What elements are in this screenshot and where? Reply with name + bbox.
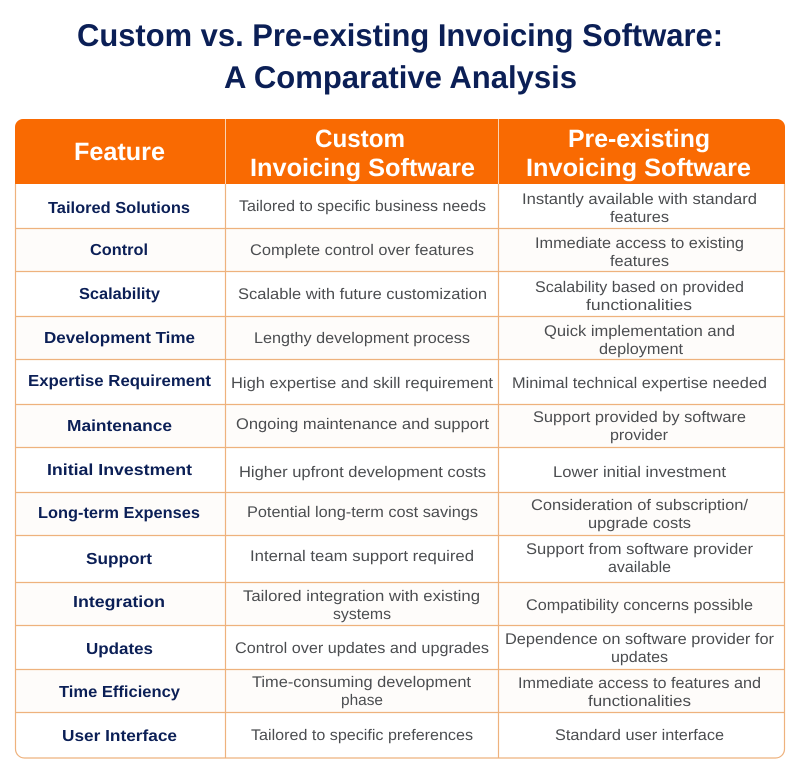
row: Long-term Expenses: Potential long-term cost savings [247,504,478,521]
row: Tailored Solutions [48,191,757,226]
row: Support [86,541,753,576]
row: Development Time: deployment [599,341,684,358]
row: Support: Support [86,551,153,568]
row: User Interface: Standard user interface [555,727,724,744]
row: Integration: systems [333,606,391,623]
table body background [16,184,784,758]
row: Control: features [610,253,669,270]
row: Development Time [44,323,735,358]
title [77,17,723,95]
row: Integration: Integration [73,594,165,611]
row: Maintenance [67,409,746,444]
row: User Interface: User Interface [62,728,177,745]
row: Updates: Updates [86,641,153,658]
header row [15,119,785,184]
row: Long-term Expenses [38,497,749,532]
row: Scalability: functionalities [586,297,692,314]
row: Maintenance: Support provided by software [533,409,746,426]
row: Tailored Solutions: Tailored Solutions [48,200,190,217]
header row: Feature [74,138,165,166]
row: Maintenance: provider [610,427,668,444]
comparison table [15,119,785,758]
row: Integration [73,588,753,623]
row: Control: Control [90,242,148,259]
row: Development Time: Lengthy development process [254,330,470,347]
row: Long-term Expenses: Consideration of subscription/ [531,497,749,514]
row: Initial Investment: Lower initial investment [553,464,727,481]
row: Scalability [79,279,744,314]
row: Scalability: Scalability [79,286,160,303]
row: Time Efficiency: Immediate access to features and [518,675,761,692]
row: Scalability: Scalable with future customization [238,286,487,303]
header row: Invoicing Software [526,154,751,182]
row: Time Efficiency: Time Efficiency [59,684,180,701]
row: Development Time: Development Time [44,330,195,347]
row: User Interface: Tailored to specific preferences [251,727,473,744]
row: Tailored Solutions: features [610,209,669,226]
header row: Pre-existing [568,125,710,153]
row: Updates [86,631,774,666]
row: Support: Support from software provider [526,541,753,558]
row: Expertise Requirement [28,373,767,392]
row: Control [90,235,744,270]
row: Time Efficiency [59,674,761,710]
row: Expertise Requirement: Minimal technical expertise needed [512,375,767,392]
row: Maintenance: Ongoing maintenance and support [236,416,490,433]
row: Updates: Control over updates and upgrades [235,640,489,657]
row: Development Time: Quick implementation and [544,323,735,340]
row: Time Efficiency: phase [341,692,383,709]
row: Scalability: Scalability based on provided [535,279,744,296]
row: Control: Complete control over features [250,242,474,259]
row: Integration: Compatibility concerns possible [526,597,753,614]
row: Time Efficiency: Time-consuming development [252,674,472,691]
row: Expertise Requirement: High expertise and skill requirement [231,375,494,392]
row: Integration: Tailored integration with existing [243,588,480,605]
row: Initial Investment: Initial Investment [47,462,193,479]
row: Expertise Requirement: Expertise Requirement [28,373,212,390]
title: Custom vs. Pre-existing Invoicing Software: [77,17,723,53]
row: Initial Investment: Higher upfront development costs [239,464,486,481]
row: Tailored Solutions: Tailored to specific business needs [239,198,486,215]
row: Initial Investment [47,462,727,481]
row: User Interface [62,727,724,745]
header row: Invoicing Software [250,154,475,182]
row: Maintenance: Maintenance [67,418,172,435]
row: Time Efficiency: functionalities [588,693,691,710]
row: Long-term Expenses: upgrade costs [588,515,691,532]
row: Updates: Dependence on software provider for [505,631,774,648]
row: Updates: updates [611,649,668,666]
row: Support: Internal team support required [250,548,474,565]
row: Control: Immediate access to existing [535,235,744,252]
row: Tailored Solutions: Instantly available with standard [522,191,757,208]
header row: Custom [315,125,405,153]
title: A Comparative Analysis [224,59,577,95]
row: Long-term Expenses: Long-term Expenses [38,505,200,522]
row: Support: available [608,559,671,576]
